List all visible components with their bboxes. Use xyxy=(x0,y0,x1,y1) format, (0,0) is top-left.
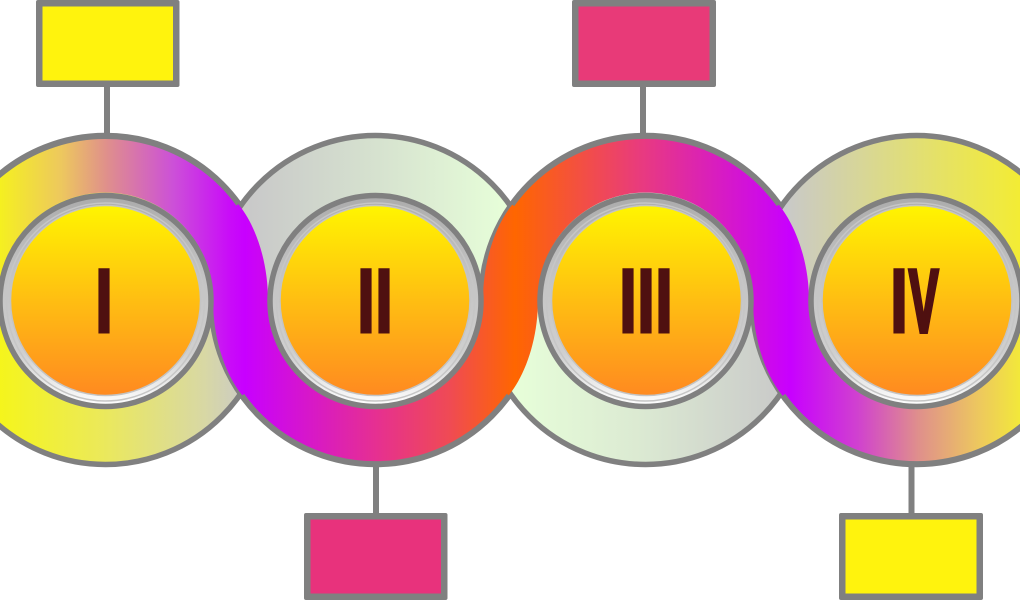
numeral IV: I xyxy=(888,249,910,354)
ribbon xyxy=(0,137,1020,465)
numeral IV: V xyxy=(909,252,938,350)
numeral IV xyxy=(888,249,938,354)
base discs xyxy=(0,136,1020,464)
step II medallion xyxy=(270,196,481,406)
numeral I: I xyxy=(93,249,115,354)
box: yellow top left xyxy=(36,0,180,87)
box: pink top xyxy=(572,0,716,87)
box: pink bottom xyxy=(304,513,448,600)
step IV medallion xyxy=(811,196,1020,406)
ribbon outer edge strokes xyxy=(0,136,1020,464)
step III medallion xyxy=(540,196,751,406)
connector lines xyxy=(104,85,914,515)
numeral II: II xyxy=(355,249,395,354)
box: yellow bottom right xyxy=(839,513,983,600)
step I medallion xyxy=(0,196,211,406)
numeral III: III xyxy=(617,249,675,354)
